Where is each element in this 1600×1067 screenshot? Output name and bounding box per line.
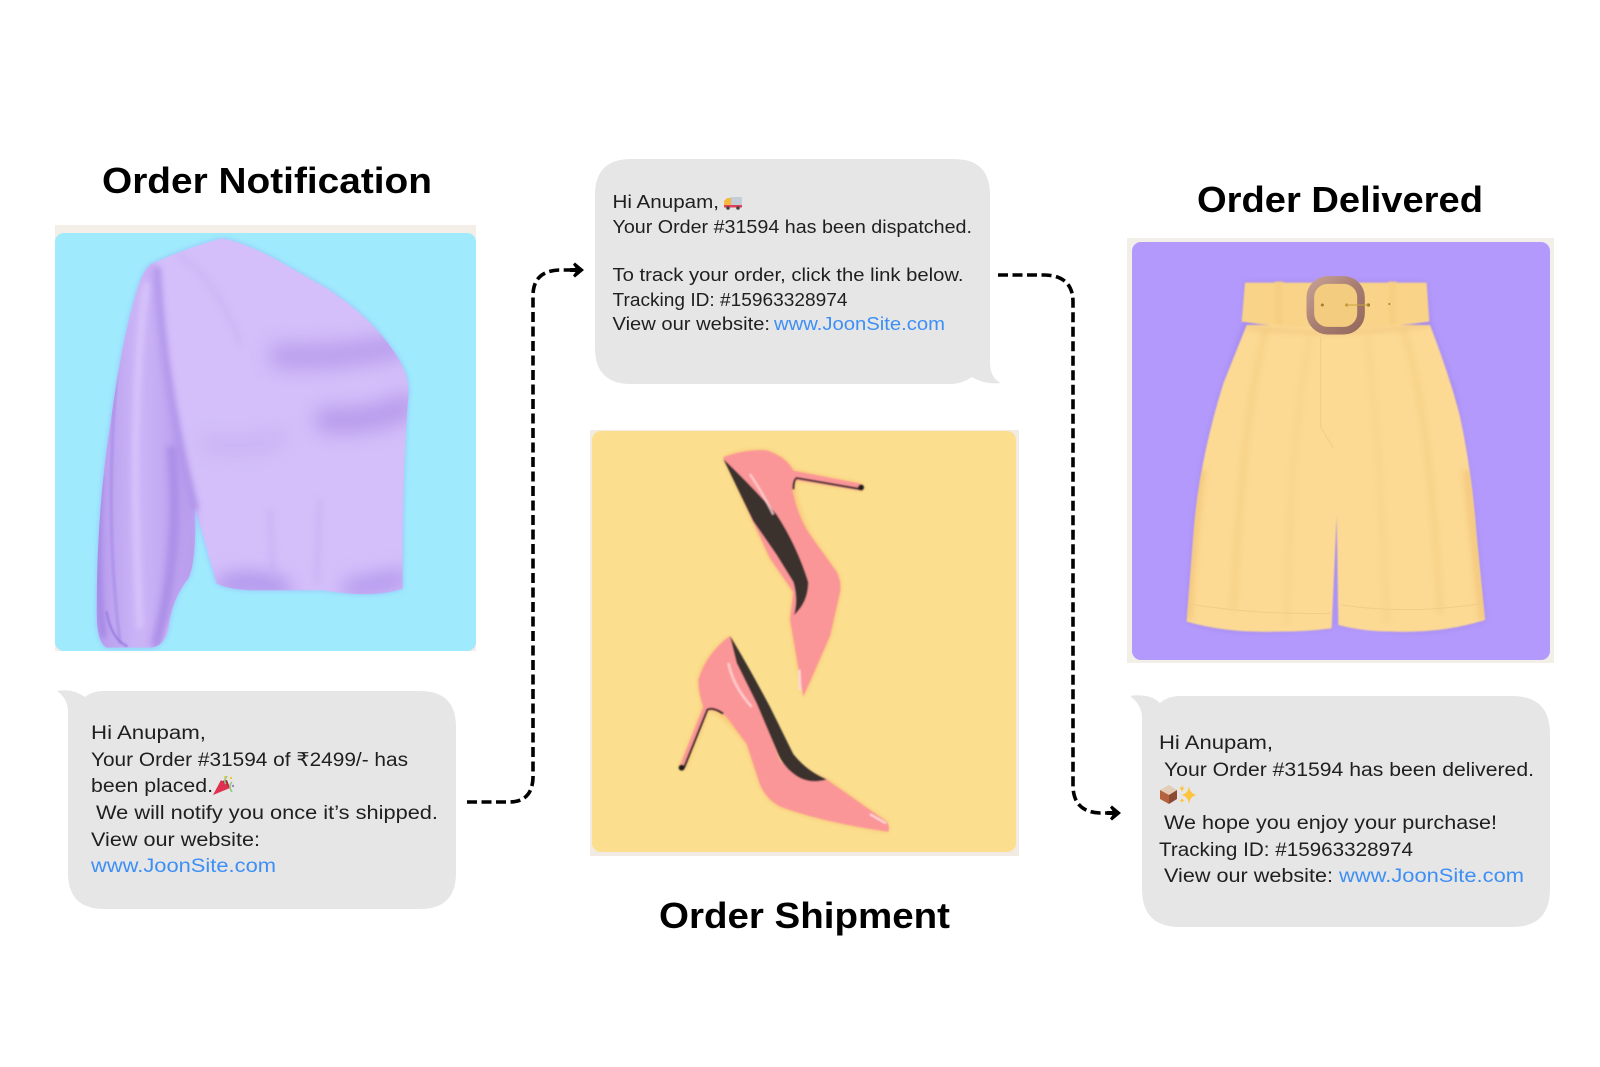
image: yellow belted shorts (1127, 238, 1554, 663)
panel: order delivered (1127, 179, 1554, 663)
sleeve fold shading (98, 256, 407, 646)
message text (90, 723, 438, 877)
message text: View our website: (612, 314, 770, 334)
message text: We will notify you once it’s shipped. (96, 803, 438, 824)
icon: party popper (213, 776, 234, 795)
message text (612, 192, 972, 334)
message text: We hope you enjoy your purchase! (1164, 813, 1497, 834)
message text: Tracking ID: #15963328974 (1159, 840, 1413, 861)
speech bubble: dispatched (595, 159, 1001, 384)
message text: To track your order, click the link below. (612, 265, 964, 285)
top shoe (723, 450, 864, 697)
message text: View our website: (91, 830, 260, 851)
icon: package (1160, 785, 1177, 804)
glow (680, 450, 888, 832)
message text: Hi Anupam, (1159, 733, 1273, 754)
heading: Order Delivered: Order Delivered (1197, 179, 1483, 220)
message text (1159, 733, 1534, 887)
image: lilac one-shoulder top (55, 224, 476, 663)
panel: order shipment (590, 430, 1019, 936)
message text: Your Order #31594 of ₹2499/- has (91, 750, 408, 771)
image: pink stiletto heels (590, 430, 1019, 856)
icon: delivery truck (724, 197, 742, 210)
pleats and hem (1188, 325, 1483, 623)
heading: Order Notification: Order Notification (102, 160, 432, 201)
bottom shoe (679, 636, 889, 832)
arrow: shipment to delivered (998, 275, 1121, 820)
message text: www.JoonSite.com (90, 856, 276, 877)
panel: order notification (55, 160, 476, 663)
message text: been placed. (91, 776, 213, 797)
speech bubble: order placed (57, 690, 456, 909)
message text: View our website: (1164, 866, 1333, 887)
speech bubble: delivered (1130, 695, 1550, 927)
message text: www.JoonSite.com (773, 314, 945, 334)
message text: Your Order #31594 has been delivered. (1164, 760, 1534, 781)
icon: sparkles (1179, 785, 1197, 804)
message text: Tracking ID: #15963328974 (612, 290, 848, 310)
message text: Hi Anupam, (91, 723, 206, 744)
message text: Hi Anupam, (612, 192, 719, 212)
heading: Order Shipment: Order Shipment (659, 895, 950, 936)
message text: www.JoonSite.com (1338, 866, 1524, 887)
belt buckle (1310, 280, 1390, 331)
arrow: placed to shipment (467, 262, 584, 802)
message text: Your Order #31594 has been dispatched. (612, 217, 972, 237)
